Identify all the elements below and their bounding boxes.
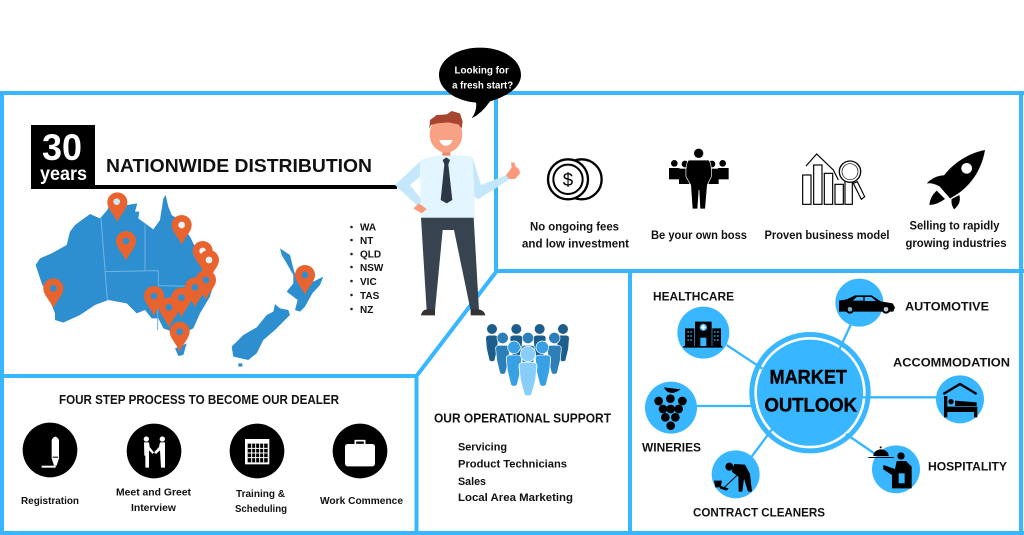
step: meet and greet: Meet and Greet xyxy=(116,487,191,499)
icon: hospital xyxy=(677,307,729,359)
item: hospitality: HOSPITALITY xyxy=(928,460,1007,474)
text: no ongoing fees: No ongoing fees xyxy=(530,220,619,234)
heading: nationwide distribution: NATIONWIDE DISTRIBUTION xyxy=(106,155,372,176)
list: support services: Product Technicians xyxy=(458,459,567,471)
map: Australia and New Zealand with pins xyxy=(36,192,323,367)
list: states and regions xyxy=(350,222,384,316)
heading: four step process: FOUR STEP PROCESS TO BECOME OUR DEALER xyxy=(59,393,339,407)
head xyxy=(429,111,463,156)
panel: benefits xyxy=(496,93,1024,271)
icon: calendar xyxy=(230,424,284,478)
text: selling to rapidly growing industries: growing industries xyxy=(906,236,1007,250)
step: meet and greet: Interview xyxy=(131,502,177,514)
icon: waiter xyxy=(868,445,920,493)
sleeves xyxy=(395,157,510,205)
panel: operational support xyxy=(416,272,630,533)
hub connectors xyxy=(697,325,937,457)
icon: group of people xyxy=(486,324,569,396)
item: contract cleaners: CONTRACT CLEANERS xyxy=(693,506,825,520)
item: wineries xyxy=(642,382,701,455)
list: states and regions: NSW xyxy=(360,263,384,274)
icon: coins xyxy=(548,159,602,199)
icon: boss and team xyxy=(669,149,729,209)
item: automotive xyxy=(835,279,989,327)
shirt xyxy=(420,155,475,218)
icon: bed xyxy=(936,375,984,423)
hub: market outlook: MARKET xyxy=(770,368,847,388)
text: no ongoing fees xyxy=(522,220,629,250)
item: accommodation xyxy=(893,356,1010,423)
list: support services xyxy=(458,442,573,504)
map pins xyxy=(43,192,315,352)
item: hospitality xyxy=(868,445,1007,493)
badge: 30 years: 30 xyxy=(42,127,82,168)
step: training and scheduling: Training & xyxy=(236,488,285,500)
step: registration xyxy=(21,423,79,507)
panel: four step process xyxy=(0,376,416,535)
item: automotive: AUTOMOTIVE xyxy=(905,300,989,314)
icon: cleaner xyxy=(712,450,760,498)
list: states and regions: NZ xyxy=(360,305,373,316)
icon: car xyxy=(835,279,895,327)
step: meet and greet xyxy=(116,424,191,514)
icon: coins: $ xyxy=(563,169,574,190)
step: training and scheduling: Scheduling xyxy=(235,503,287,515)
speech bubble: a fresh start? xyxy=(452,81,513,92)
hands xyxy=(413,162,520,213)
panel: market outlook xyxy=(630,271,1024,535)
text: be your own boss: Be your own boss xyxy=(651,228,747,242)
icon: pen xyxy=(23,423,77,477)
character: businessman xyxy=(395,111,520,315)
step: training and scheduling xyxy=(230,424,287,515)
hub: market outlook: OUTLOOK xyxy=(764,395,857,416)
tie xyxy=(441,157,452,203)
step: registration: Registration xyxy=(21,495,79,507)
list: states and regions: QLD xyxy=(360,250,381,260)
speech bubble xyxy=(439,48,521,118)
list: support services: Local Area Marketing xyxy=(458,492,573,504)
text: proven business model: Proven business model xyxy=(764,228,890,242)
icon: handshake xyxy=(127,424,181,478)
speech bubble: Looking for xyxy=(454,66,509,77)
trousers and shoes xyxy=(421,218,485,315)
icon: briefcase xyxy=(333,424,387,478)
badge: 30 years xyxy=(31,125,95,189)
step: work commence xyxy=(320,424,403,507)
hub: market outlook xyxy=(749,332,871,453)
item: contract cleaners xyxy=(693,450,825,520)
icon: business chart xyxy=(803,154,865,204)
item: healthcare xyxy=(653,290,734,359)
list: states and regions: TAS xyxy=(360,291,380,302)
list: states and regions: WA xyxy=(360,222,376,234)
item: healthcare: HEALTHCARE xyxy=(653,290,734,304)
list: support services: Sales xyxy=(458,476,486,488)
item: wineries: WINERIES xyxy=(642,441,701,455)
text: selling to rapidly growing industries: Selling to rapidly xyxy=(910,218,1000,232)
list: states and regions: NT xyxy=(360,236,373,247)
icon: grapes xyxy=(645,382,697,434)
icon: rocket xyxy=(927,150,985,209)
badge: 30 years: years xyxy=(40,164,87,185)
list: support services: Servicing xyxy=(458,442,507,454)
upper body xyxy=(395,111,520,218)
list: states and regions: VIC xyxy=(360,277,377,288)
text: no ongoing fees: and low investment xyxy=(522,236,629,250)
text: selling to rapidly growing industries xyxy=(906,218,1007,250)
panel: nationwide distribution xyxy=(2,93,496,376)
heading: our operational support: OUR OPERATIONAL SUPPORT xyxy=(434,412,611,426)
step: work commence: Work Commence xyxy=(320,495,403,507)
item: accommodation: ACCOMMODATION xyxy=(893,356,1010,370)
